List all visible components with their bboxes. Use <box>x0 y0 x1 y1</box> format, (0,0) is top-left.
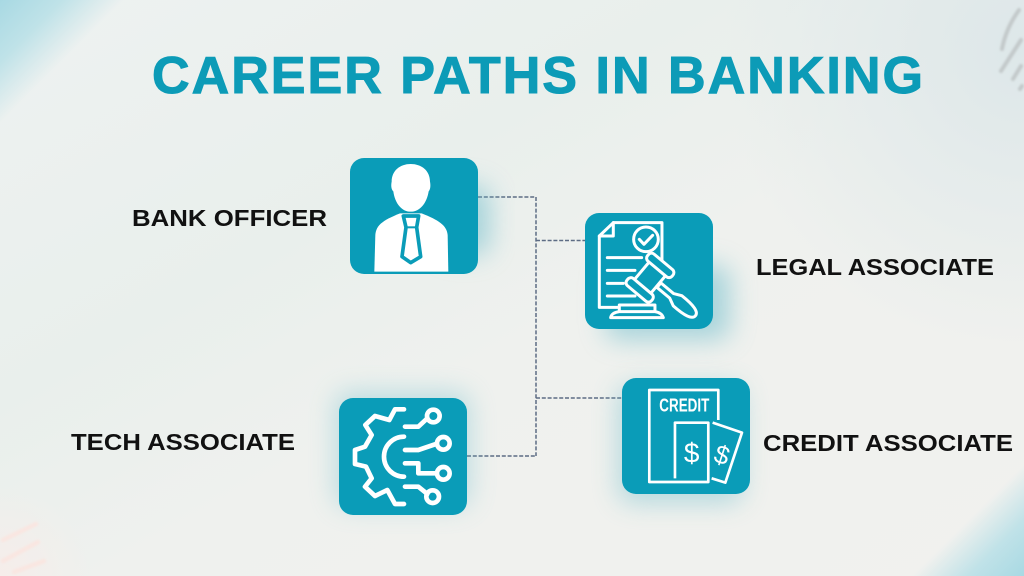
icon: credit document and cash: $ <box>684 438 700 469</box>
decorative scribble: top right <box>1001 10 1022 89</box>
label: bank officer: BANK OFFICER <box>132 205 327 231</box>
icon: gear with circuits <box>355 409 450 504</box>
card: tech associate <box>335 392 470 515</box>
title: CAREER PATHS IN BANKING <box>152 47 925 105</box>
label: tech associate: TECH ASSOCIATE <box>71 429 295 455</box>
label: legal associate: LEGAL ASSOCIATE <box>756 254 994 280</box>
card: legal associate <box>585 213 730 340</box>
icon: businessman <box>374 164 448 272</box>
icon: document and gavel <box>599 223 709 332</box>
connector lines <box>467 197 622 456</box>
card: credit associate <box>618 378 750 503</box>
icon: credit document and cash: CREDIT <box>659 395 710 416</box>
icon: credit document and cash <box>649 390 742 483</box>
decorative scribble: bottom left <box>3 524 44 572</box>
card: bank officer <box>350 158 490 274</box>
icon: credit document and cash: $ <box>711 438 734 471</box>
label: credit associate: CREDIT ASSOCIATE <box>763 430 1013 456</box>
